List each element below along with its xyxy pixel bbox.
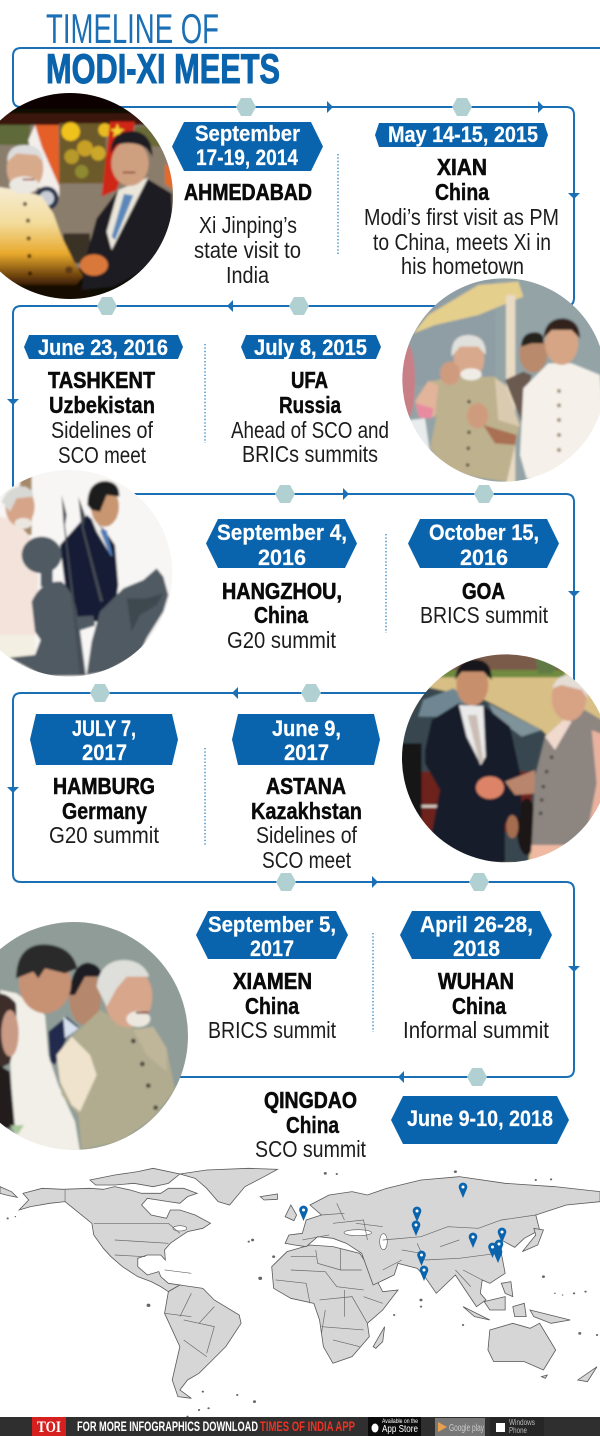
description: India (226, 262, 269, 288)
description: Modi’s first visit as PM (364, 204, 559, 230)
photo: Xi and Modi walking (0, 915, 193, 1155)
place (438, 968, 514, 1019)
date badge: July 8, 2015 (254, 335, 367, 360)
place: Uzbekistan (49, 392, 155, 418)
place: GOA (462, 578, 505, 604)
place: TASHKENT (48, 367, 155, 393)
entry: Qingdao (255, 1087, 569, 1162)
Windows Phone badge: Phone (509, 1426, 527, 1435)
description: Informal summit (403, 1017, 550, 1043)
date badge: May 14-15, 2015 (388, 122, 538, 147)
title: MODI-XI MEETS (46, 45, 280, 92)
place (48, 367, 155, 418)
App Store badge (368, 1417, 421, 1436)
place (53, 773, 155, 824)
description: Sidelines of (51, 417, 154, 443)
entry: Goa (408, 519, 559, 628)
description: state visit to (194, 237, 301, 263)
entry: Hamburg (30, 714, 178, 848)
place: WUHAN (438, 968, 514, 994)
Windows Phone badge (490, 1417, 544, 1436)
date badge (30, 714, 178, 765)
photo: Modi gesturing beside Xi (395, 275, 600, 488)
Windows Phone badge: Windows (509, 1418, 535, 1427)
place (251, 773, 362, 824)
description: BRICS summit (420, 602, 549, 628)
description: his hometown (401, 253, 524, 279)
date badge (206, 519, 357, 570)
description: SCO summit (255, 1136, 367, 1162)
dotted dividers (205, 154, 386, 1032)
date badge (400, 911, 552, 961)
photo: Modi and Xi by horse statue (0, 465, 180, 682)
photo: Modi and Xi handshake with flags (0, 93, 173, 299)
place: Germany (62, 798, 147, 824)
place: HANGZHOU, (222, 578, 342, 604)
date badge: September (195, 121, 300, 146)
entry: Wuhan (400, 911, 552, 1043)
date badge (408, 519, 559, 570)
entry: Xian (364, 122, 559, 279)
date badge: 2017 (284, 740, 329, 765)
App Store badge: App Store (382, 1424, 418, 1435)
date badge: June 23, 2016 (38, 335, 168, 360)
entry: Astana (232, 714, 380, 873)
place: AHMEDABAD (184, 179, 312, 205)
description: Sidelines of (256, 822, 358, 848)
date badge: JULY 7, (72, 716, 136, 741)
date badge: September 5, (208, 912, 336, 937)
description (256, 822, 358, 873)
date badge: 17-19, 2014 (196, 145, 299, 170)
date badge: 2017 (82, 740, 127, 765)
description (231, 417, 389, 467)
date badge: September 4, (217, 520, 347, 545)
description: Ahead of SCO and (231, 417, 389, 443)
place: ASTANA (266, 773, 346, 799)
place: China (452, 993, 506, 1019)
place (233, 968, 312, 1019)
place: Russia (279, 392, 341, 418)
date badge: October 15, (429, 520, 539, 545)
world map (0, 1168, 600, 1418)
entry: Ahmedabad (172, 121, 323, 288)
entry: Hangzhou (206, 519, 357, 653)
description (364, 204, 559, 279)
footer bar (0, 1417, 600, 1436)
date badge (196, 911, 348, 961)
place: UFA (291, 367, 328, 393)
place (264, 1087, 357, 1138)
photo: Xi and Modi handshake by car (395, 650, 600, 867)
timeline path (7, 48, 600, 1086)
date badge: 2018 (453, 936, 500, 961)
download message: FOR MORE INFOGRAPHICS DOWNLOAD (77, 1418, 258, 1434)
TOI logo: TOI (37, 1419, 61, 1436)
entry: Tashkent (24, 335, 183, 468)
description (194, 212, 301, 288)
title (46, 5, 280, 92)
description: BRICS summit (208, 1017, 337, 1043)
Google Play badge (435, 1418, 485, 1436)
date badge (391, 1096, 569, 1144)
App Store badge: Available on the (382, 1419, 419, 1425)
title: TIMELINE OF (46, 5, 219, 52)
place (435, 154, 489, 205)
date badge: June 9, (272, 716, 341, 741)
place: China (245, 993, 299, 1019)
place: China (254, 602, 308, 628)
place: China (435, 179, 489, 205)
map location pins (299, 1183, 506, 1281)
date badge: 2016 (460, 545, 508, 570)
description: SCO meet (262, 847, 351, 873)
description: G20 summit (49, 822, 160, 848)
place: XIAMEN (233, 968, 312, 994)
description (51, 417, 154, 468)
entry: Xiamen (196, 911, 348, 1043)
description: BRICs summits (242, 441, 378, 467)
Google Play badge: Google play (449, 1423, 484, 1434)
date badge: April 26-28, (420, 912, 533, 937)
date badge: 2017 (250, 936, 294, 961)
place: China (286, 1112, 339, 1138)
place (279, 367, 341, 418)
download message: TIMES OF INDIA APP (260, 1418, 355, 1434)
date badge: June 9-10, 2018 (407, 1106, 553, 1131)
date badge: 2016 (258, 545, 306, 570)
place: Kazakhstan (251, 798, 362, 824)
description: G20 summit (227, 627, 337, 653)
place: QINGDAO (264, 1087, 357, 1113)
date badge (172, 121, 323, 171)
place: XIAN (437, 154, 487, 180)
date badge (232, 714, 380, 765)
place (222, 578, 342, 628)
description: Xi Jinping’s (199, 212, 297, 238)
description: SCO meet (58, 442, 146, 468)
place: HAMBURG (53, 773, 155, 799)
entry: Ufa (231, 335, 389, 467)
description: to China, meets Xi in (373, 229, 551, 255)
